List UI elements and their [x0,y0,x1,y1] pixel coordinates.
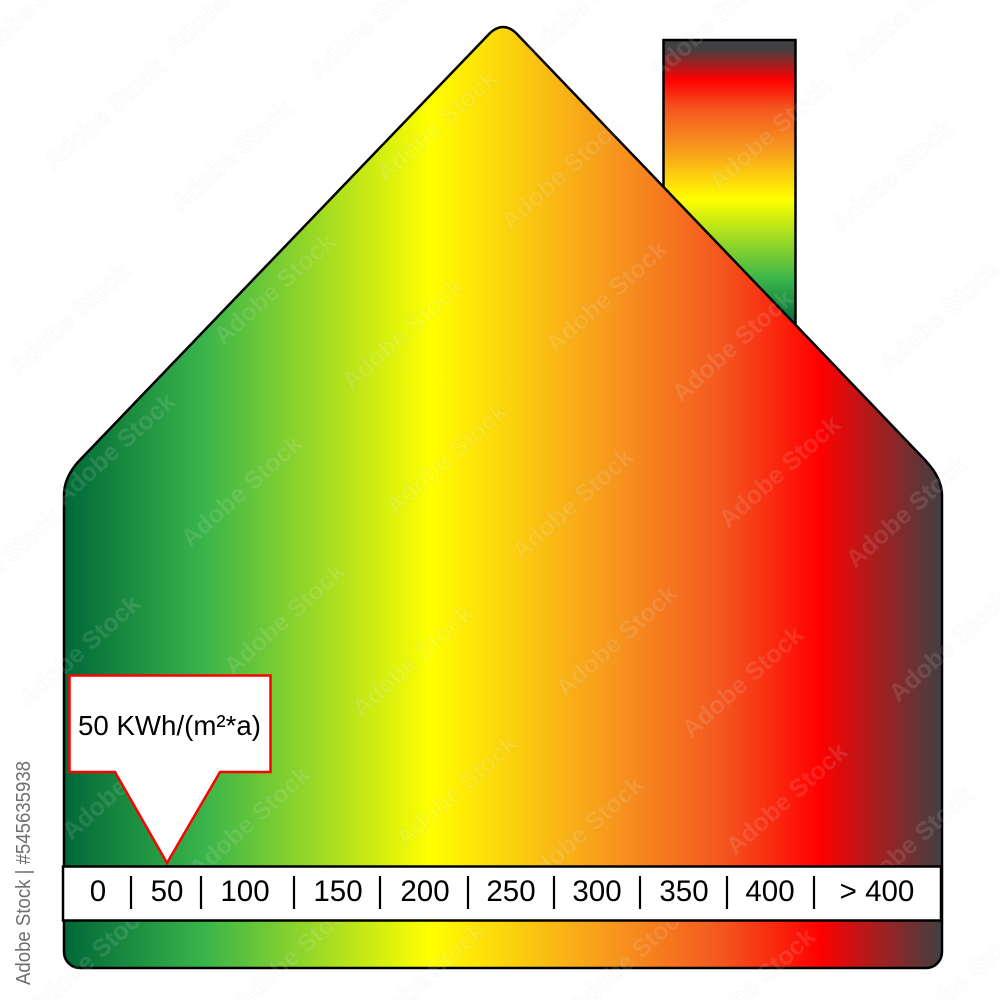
scale labels: 100 [220,875,270,908]
faint watermark pattern: Adobe Stock [391,729,523,853]
faint watermark pattern: Adobe Stock [39,52,171,176]
scale labels: 50 [151,875,183,908]
scale labels: > 400 [840,875,914,908]
scale labels [90,875,914,908]
faint watermark pattern: Adobe Stock [347,599,479,723]
faint watermark pattern: Adobe Stock [841,450,973,574]
faint watermark pattern: Adobe Stock [219,557,351,681]
faint watermark pattern: Adobe Stock [496,112,628,236]
faint watermark pattern: Adobe Stock [57,722,189,846]
faint watermark pattern: Adobe Stock [49,387,181,511]
faint watermark pattern: Adobe Stock [847,780,979,904]
faint watermark pattern: Adobe Stock [371,64,503,188]
scale labels: 300 [572,875,622,908]
faint watermark pattern: Adobe Stock [337,272,469,396]
scale labels: 350 [659,875,709,908]
side credit text: Adobe Stock | #545635938 [13,761,35,985]
scale labels: 200 [400,875,450,908]
faint watermark pattern: Adobe Stock [677,620,809,744]
scale bar [63,866,941,920]
faint watermark pattern: Adobe Stock [721,737,853,861]
scale labels: 400 [745,875,795,908]
scale labels: 150 [313,875,363,908]
faint watermark pattern: Adobe Stock [381,397,513,521]
faint watermark pattern: Adobe Stock [4,257,136,381]
faint watermark pattern: Adobe Stock [14,589,146,713]
callout: 50 KWh/(m²*a): 50 KWh/(m²*a) [78,710,261,741]
faint watermark pattern: Adobe Stock [176,429,308,553]
scale labels: 0 [90,875,106,908]
callout: 50 KWh/(m²*a) [70,676,270,863]
icon: chimney [664,40,796,330]
faint watermark pattern: Adobe Stock [517,770,649,894]
faint watermark pattern: Adobe Stock [541,235,673,359]
scale labels: 250 [486,875,536,908]
faint watermark pattern: Adobe Stock [667,284,799,408]
faint watermark pattern: Adobe Stock [827,114,959,238]
faint watermark pattern: Adobe Stock [184,760,316,884]
faint watermark pattern: Adobe Stock [209,227,341,351]
scale separators [131,876,814,909]
faint watermark pattern: Adobe Stock [166,94,298,218]
faint watermark pattern: Adobe Stock [704,72,836,196]
faint watermark pattern: Adobe Stock [714,410,846,534]
faint watermark pattern: Adobe Stock [551,579,683,703]
faint watermark pattern: Adobe Stock [507,442,639,566]
